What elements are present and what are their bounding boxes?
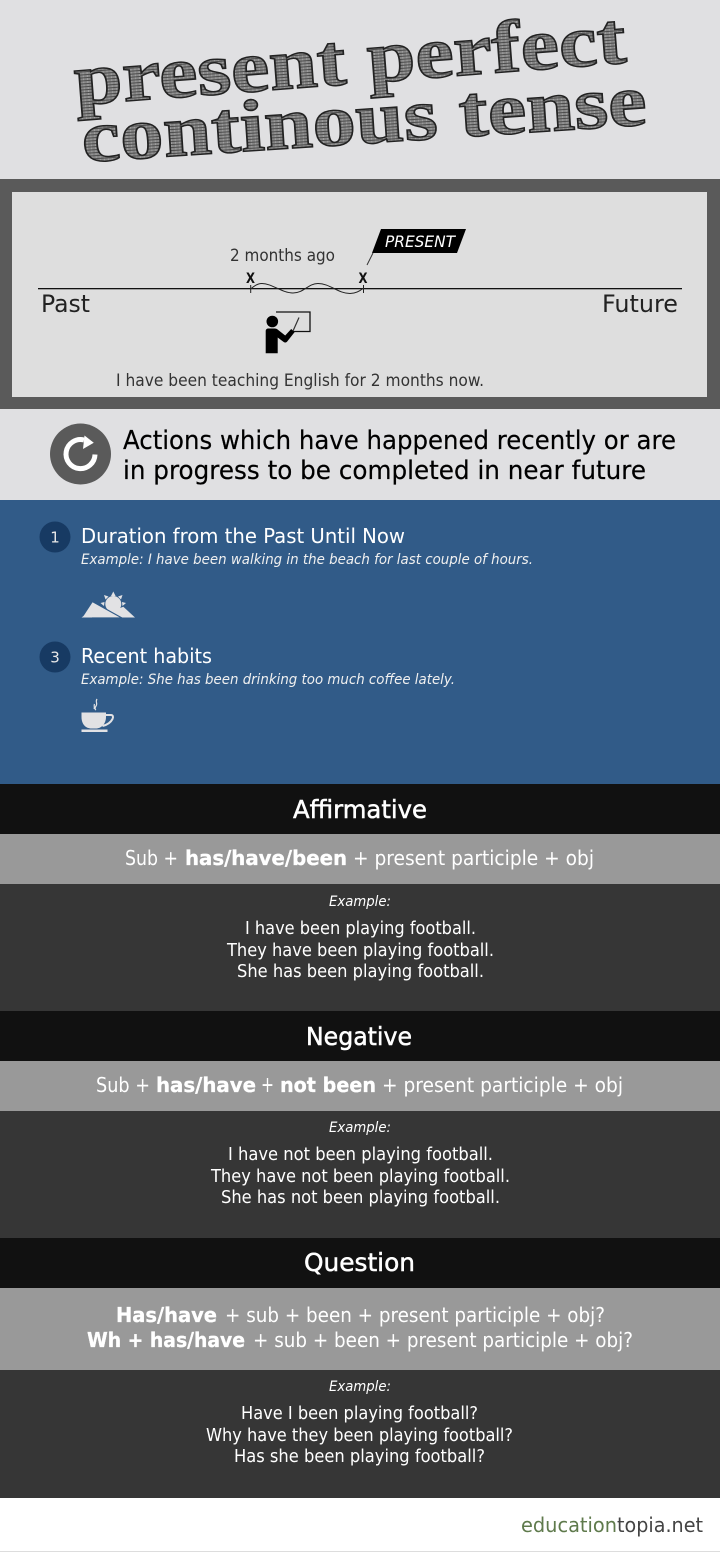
examples: question: Have I been playing football? xyxy=(241,1403,478,1424)
formula: affirmative xyxy=(125,846,594,870)
title: continous tense xyxy=(79,60,649,179)
heading: negative: Negative xyxy=(306,1022,412,1051)
examples: negative xyxy=(210,1120,510,1208)
timeline caption: I have been teaching English for 2 months now. xyxy=(116,371,484,390)
heading: question: Question xyxy=(304,1248,415,1277)
icon: teacher at board xyxy=(266,312,310,353)
formula: negative: + present participle + obj xyxy=(382,1073,623,1097)
footer logo xyxy=(521,1513,703,1537)
use 3: recent habits: Recent habits xyxy=(81,644,212,668)
formula: question: + sub + been + present participle + obj? xyxy=(253,1328,633,1352)
timeline axis xyxy=(38,288,682,289)
footer logo: topia.net xyxy=(617,1513,703,1537)
examples: affirmative: I have been playing football. xyxy=(245,918,476,939)
definition text: in progress to be completed in near future xyxy=(123,456,646,486)
label: past: Past xyxy=(41,290,90,318)
panel: negative xyxy=(0,1011,720,1238)
icon: coffee cup xyxy=(82,699,113,732)
examples: negative: She has not been playing football. xyxy=(221,1187,500,1208)
formula: affirmative: has/have/been xyxy=(185,846,347,870)
formula: affirmative: + present participle + obj xyxy=(353,846,594,870)
definition text: Actions which have happened recently or are xyxy=(123,426,676,456)
examples: affirmative xyxy=(226,894,494,982)
marker: start x: X xyxy=(246,271,255,287)
marker: present x: X xyxy=(358,271,368,287)
use 3: recent habits xyxy=(40,642,455,688)
use 3: recent habits: Example: She has been drinking too much coffee lately. xyxy=(81,672,455,688)
formula: question: + sub + been + present participle + obj? xyxy=(225,1303,605,1327)
title xyxy=(71,0,649,179)
use 3: recent habits: 3 xyxy=(50,648,60,666)
panel: uses xyxy=(0,500,720,784)
panel: affirmative xyxy=(0,784,720,1011)
examples: affirmative: She has been playing football. xyxy=(237,961,484,982)
formula: question: Has/have xyxy=(116,1303,217,1327)
formula: question: Wh + has/have xyxy=(87,1328,245,1352)
panel: definition xyxy=(0,409,720,500)
formula: negative: has/have xyxy=(156,1073,256,1097)
use 1: duration: Example: I have been walking in the beach for last couple of hours. xyxy=(81,552,533,568)
definition text xyxy=(123,426,676,486)
formula: negative xyxy=(96,1073,623,1098)
formula: affirmative: Sub + xyxy=(125,846,178,870)
icon: refresh xyxy=(50,424,111,484)
examples: question: Why have they been playing football? xyxy=(206,1425,513,1446)
present flag xyxy=(367,229,466,265)
wavy duration line xyxy=(251,284,364,294)
footer logo: education xyxy=(521,1513,617,1537)
examples: question: Example: xyxy=(329,1379,391,1395)
formula: negative: Sub + xyxy=(96,1073,150,1097)
heading: affirmative: Affirmative xyxy=(293,795,427,824)
formula: negative: not been xyxy=(280,1073,376,1097)
label: 2 months ago: 2 months ago xyxy=(230,246,335,265)
examples: question xyxy=(206,1379,513,1467)
panel: question xyxy=(0,1238,720,1498)
examples: question: Has she been playing football? xyxy=(234,1446,485,1467)
examples: affirmative: Example: xyxy=(329,894,391,910)
title: present perfect xyxy=(71,0,629,122)
use 1: duration xyxy=(40,522,533,568)
present flag: PRESENT xyxy=(385,232,456,251)
icon: sun over mountains xyxy=(82,592,135,618)
formula: question xyxy=(87,1303,633,1352)
panel: footer xyxy=(0,1498,720,1552)
examples: negative: Example: xyxy=(329,1120,391,1136)
label: future: Future xyxy=(602,290,678,318)
use 1: duration: Duration from the Past Until Now xyxy=(81,524,405,548)
use 1: duration: 1 xyxy=(50,528,60,546)
panel: timeline xyxy=(0,179,720,409)
examples: negative: They have not been playing football. xyxy=(210,1166,510,1187)
examples: affirmative: They have been playing football. xyxy=(226,940,494,961)
examples: negative: I have not been playing football. xyxy=(228,1144,493,1165)
formula: negative: + xyxy=(261,1073,274,1098)
panel: title background xyxy=(0,0,720,179)
